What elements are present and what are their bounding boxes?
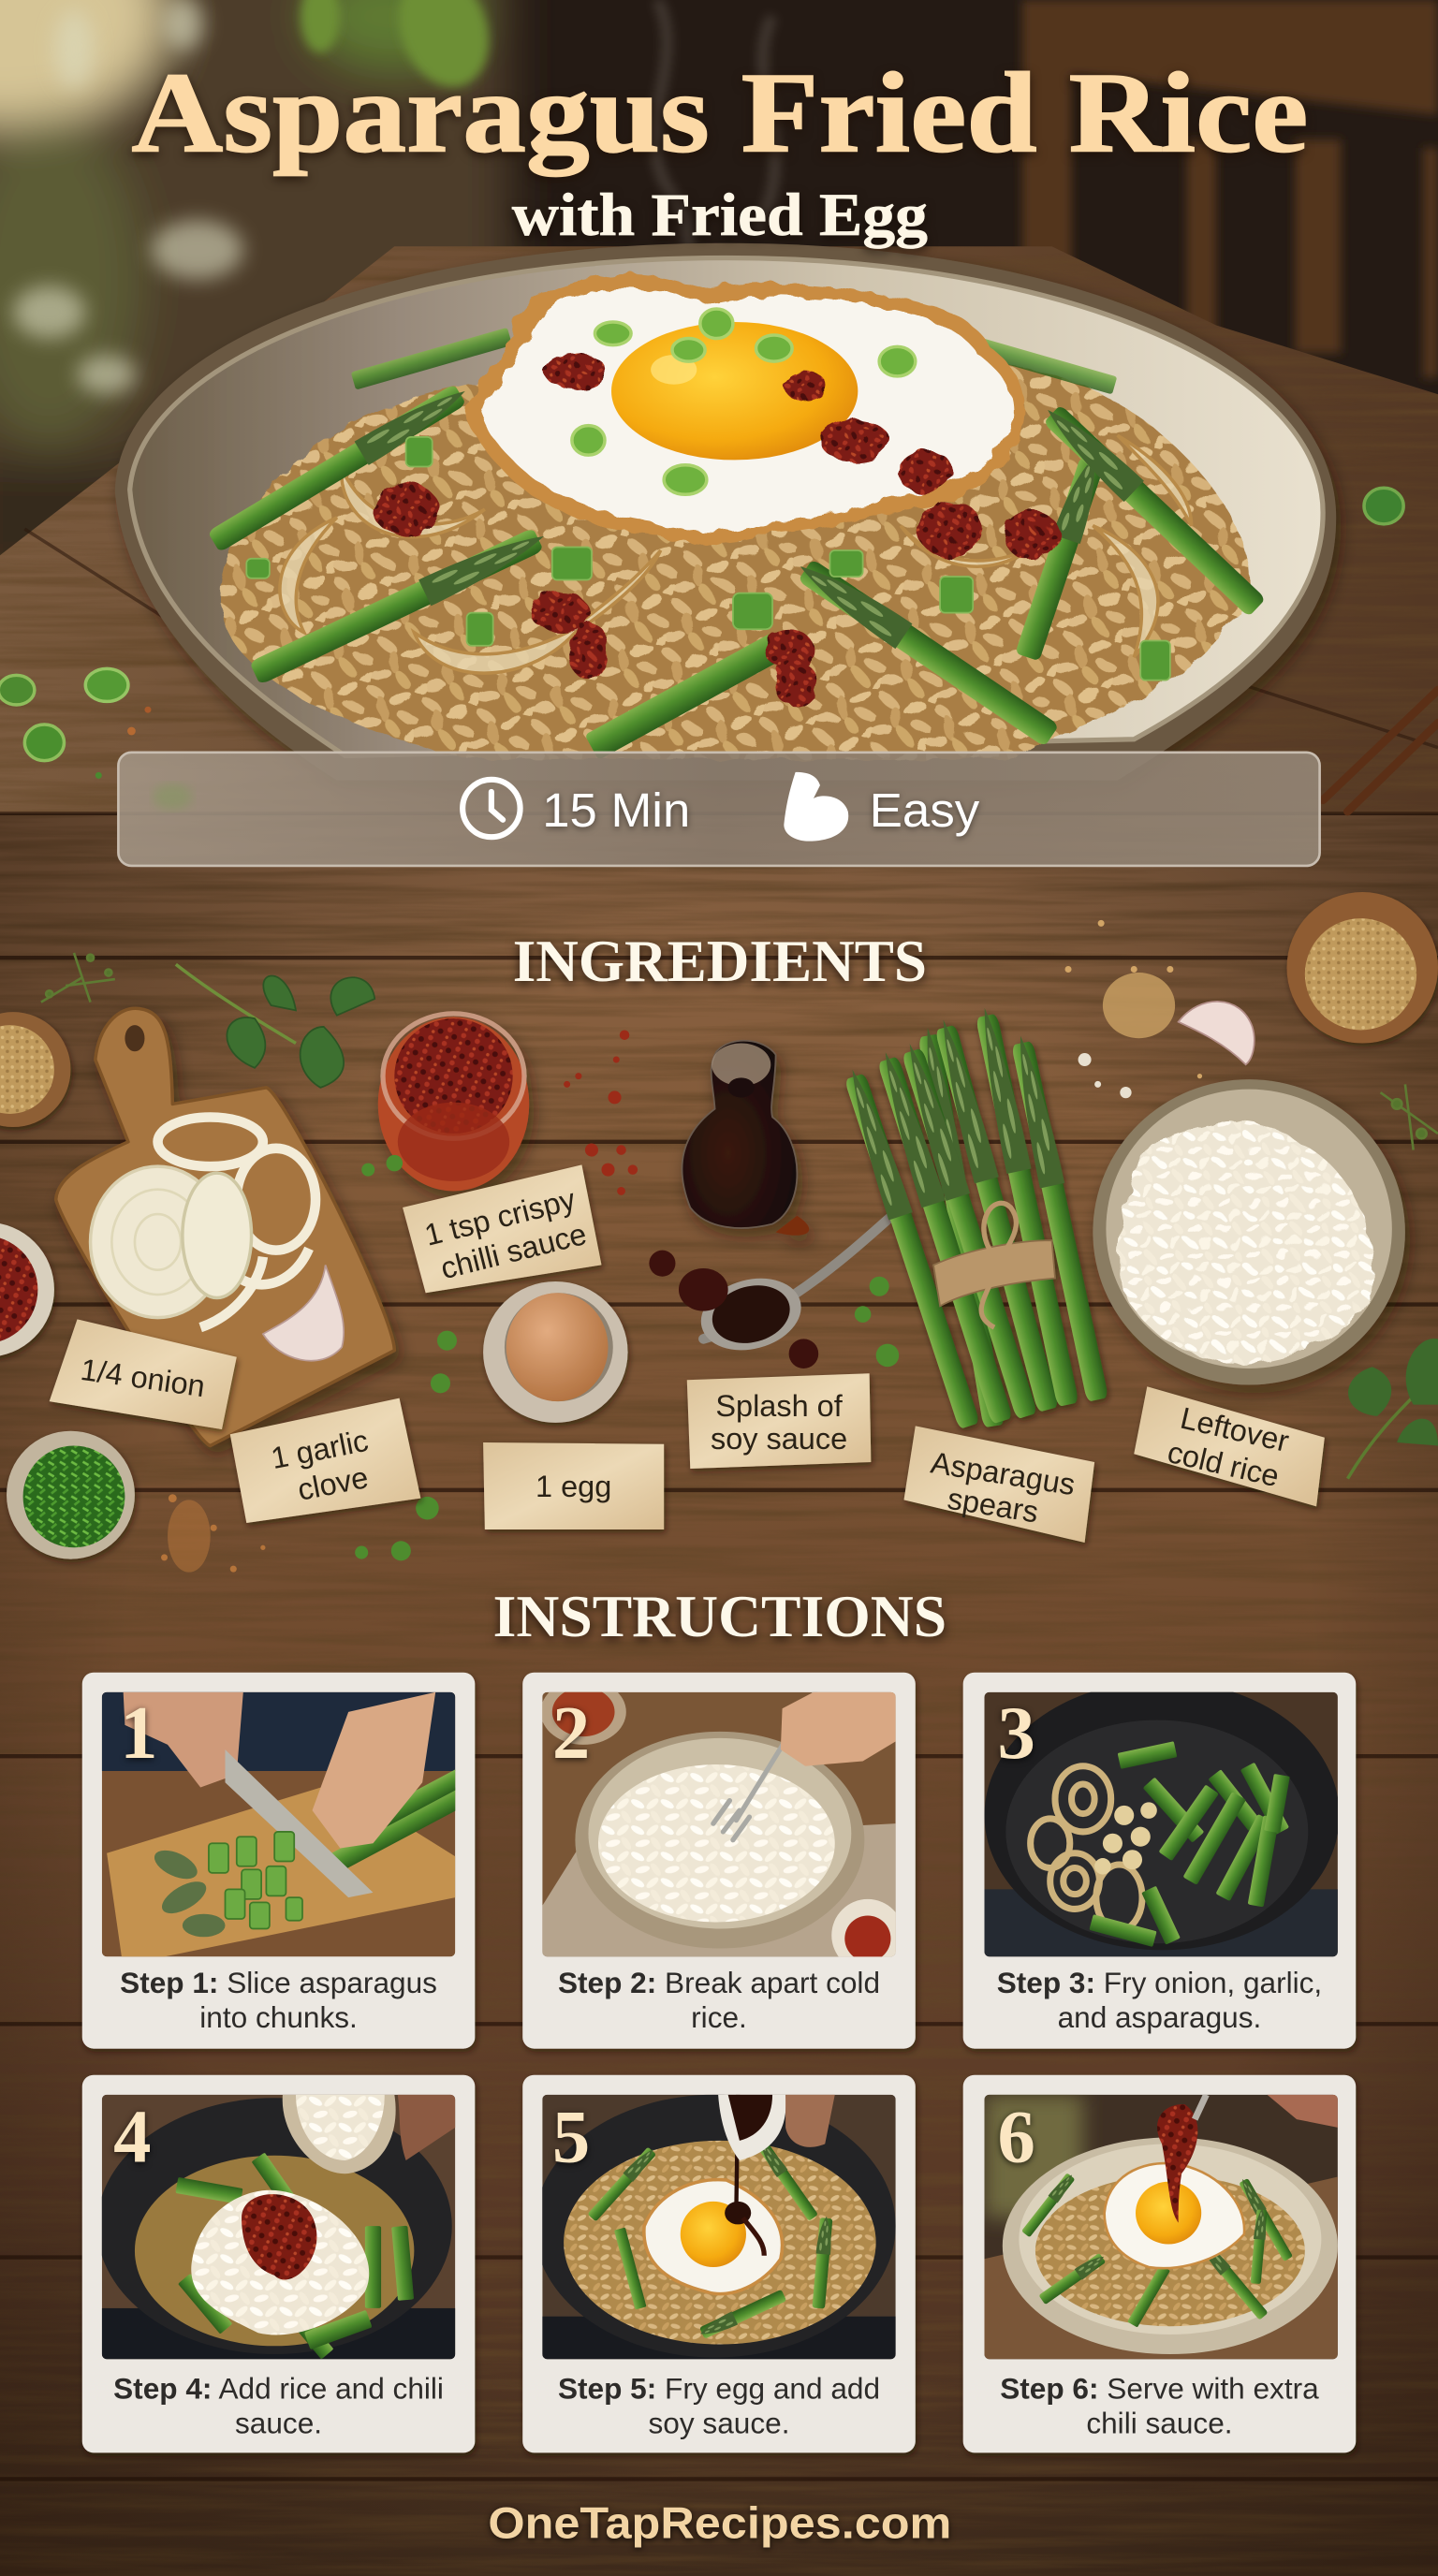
- label: asparagus: spears: [946, 1482, 1041, 1530]
- step card 3: and asparagus.: [1058, 2000, 1261, 2034]
- step card 5: soy sauce.: [649, 2406, 789, 2439]
- label: garlic: clove: [295, 1460, 371, 1507]
- rice: [220, 350, 1250, 759]
- label: soy sauce: soy sauce: [711, 1422, 847, 1456]
- caption: Step 3: Fry onion, garlic,: [997, 1966, 1322, 1999]
- scallion bowl: [7, 1431, 135, 1559]
- table top: [0, 246, 1438, 813]
- steam: [419, 0, 775, 370]
- caption: Step 6: Serve with extra: [1000, 2371, 1319, 2405]
- label: asparagus: Asparagus: [929, 1445, 1078, 1501]
- crumbs: [1065, 920, 1202, 1098]
- label: onion: 1/4 onion: [79, 1353, 207, 1403]
- title: Asparagus Fried Rice: [131, 49, 1308, 176]
- chopsticks: [1323, 690, 1438, 812]
- caption: Step 4: Add rice and chili: [113, 2371, 444, 2405]
- scallions on egg: [572, 309, 916, 494]
- caption: Step 1: Slice asparagus: [120, 1966, 437, 1999]
- asparagus bundle: [841, 1005, 1110, 1430]
- sliced onion: [91, 1117, 315, 1327]
- chili jar: [378, 1014, 529, 1191]
- icon: flexed arm: [784, 772, 848, 842]
- step number: 2: [552, 1691, 590, 1775]
- label: rice: [1134, 1386, 1325, 1506]
- garlic clove: [263, 1265, 344, 1361]
- label: chilli sauce: [403, 1164, 601, 1293]
- label: chilli sauce: 1 tsp crispy: [421, 1182, 580, 1252]
- label: chilli sauce: chilli sauce: [437, 1217, 590, 1285]
- step card 4: [82, 2075, 475, 2452]
- cilantro, lower right: [1347, 1339, 1438, 1479]
- spice bowl, top right: [1287, 892, 1438, 1043]
- top photo background: [0, 0, 1438, 813]
- heading: ingredients: INGREDIENTS: [513, 929, 927, 994]
- bowl of cold rice: [1093, 1079, 1405, 1385]
- label: egg: 1 egg: [536, 1470, 611, 1503]
- chili flakes scattered: [564, 1030, 638, 1195]
- photo: adding rice and chili: [97, 2095, 455, 2360]
- caption: Step 2: Break apart cold: [558, 1966, 880, 1999]
- photo: breaking apart rice: [542, 1692, 896, 1956]
- photo: slicing asparagus: [102, 1692, 469, 1956]
- footer: website: OneTapRecipes.com: [488, 2499, 951, 2549]
- time label: 15 Min: [542, 783, 690, 837]
- step card 6: [963, 2075, 1356, 2452]
- onions: [280, 435, 1192, 673]
- photo: frying in wok: [985, 1680, 1340, 1956]
- garlic, top right: [1179, 1002, 1255, 1064]
- chili crisp on rice: [373, 483, 1060, 707]
- cutting board: [56, 1008, 394, 1445]
- step number: 1: [120, 1691, 158, 1775]
- info bar: time and difficulty: [118, 753, 1320, 866]
- fried egg: [468, 274, 1025, 544]
- label: garlic: [230, 1398, 420, 1523]
- label: garlic: 1 garlic: [269, 1424, 371, 1475]
- step card 6: chili sauce.: [1086, 2406, 1233, 2439]
- label: onion: [50, 1319, 237, 1429]
- step card 5: [522, 2075, 916, 2452]
- ingredients flat lay: [0, 892, 1438, 1573]
- scallions in rice: [246, 437, 1170, 681]
- subtitle: with Fried Egg: [512, 182, 928, 249]
- step card 3: [963, 1673, 1356, 2049]
- label: egg: [483, 1442, 664, 1530]
- caption: Step 5: Fry egg and add: [558, 2371, 880, 2405]
- step number: 5: [552, 2096, 590, 2179]
- chili on egg: [544, 353, 953, 493]
- step card 1: into chunks.: [199, 2000, 358, 2034]
- step card 2: [522, 1673, 916, 2049]
- back asparagus: [351, 328, 512, 390]
- egg in a small dish: [483, 1281, 628, 1423]
- hero dish: bowl with fried rice and egg: [115, 243, 1336, 781]
- cilantro top: [176, 964, 374, 1088]
- difficulty label: Easy: [870, 783, 980, 837]
- bowl: [115, 243, 1336, 781]
- photo: egg and soy sauce: [535, 2095, 896, 2359]
- label: asparagus: [903, 1426, 1094, 1543]
- label: rice: Leftover: [1178, 1401, 1292, 1458]
- step card 2: rice.: [691, 2000, 747, 2034]
- step card 4: sauce.: [235, 2406, 322, 2439]
- label: soy sauce: [687, 1373, 871, 1469]
- chili flakes bowl, left: [0, 1222, 54, 1357]
- label: rice: cold rice: [1165, 1435, 1283, 1493]
- soy sauce bottle: [682, 1041, 809, 1236]
- small spice bowl, left: [0, 1012, 70, 1127]
- asparagus spears: [207, 379, 472, 554]
- label: soy sauce: Splash of: [715, 1389, 844, 1423]
- heading: instructions: INSTRUCTIONS: [493, 1584, 946, 1649]
- step number: 4: [113, 2096, 152, 2179]
- soy spoon and drops: [649, 1212, 896, 1368]
- icon: clock: [462, 780, 521, 837]
- step number: 6: [998, 2096, 1035, 2179]
- step card 1: [82, 1673, 475, 2049]
- scallion bits: [355, 1155, 899, 1560]
- spice crumbs lower left: [161, 1494, 266, 1573]
- herb sprigs: [41, 953, 1438, 1150]
- photo: serving with chili: [985, 2095, 1338, 2359]
- chair: [1022, 0, 1438, 378]
- spilled spring onions on the table: [0, 488, 1403, 779]
- step number: 3: [998, 1691, 1035, 1775]
